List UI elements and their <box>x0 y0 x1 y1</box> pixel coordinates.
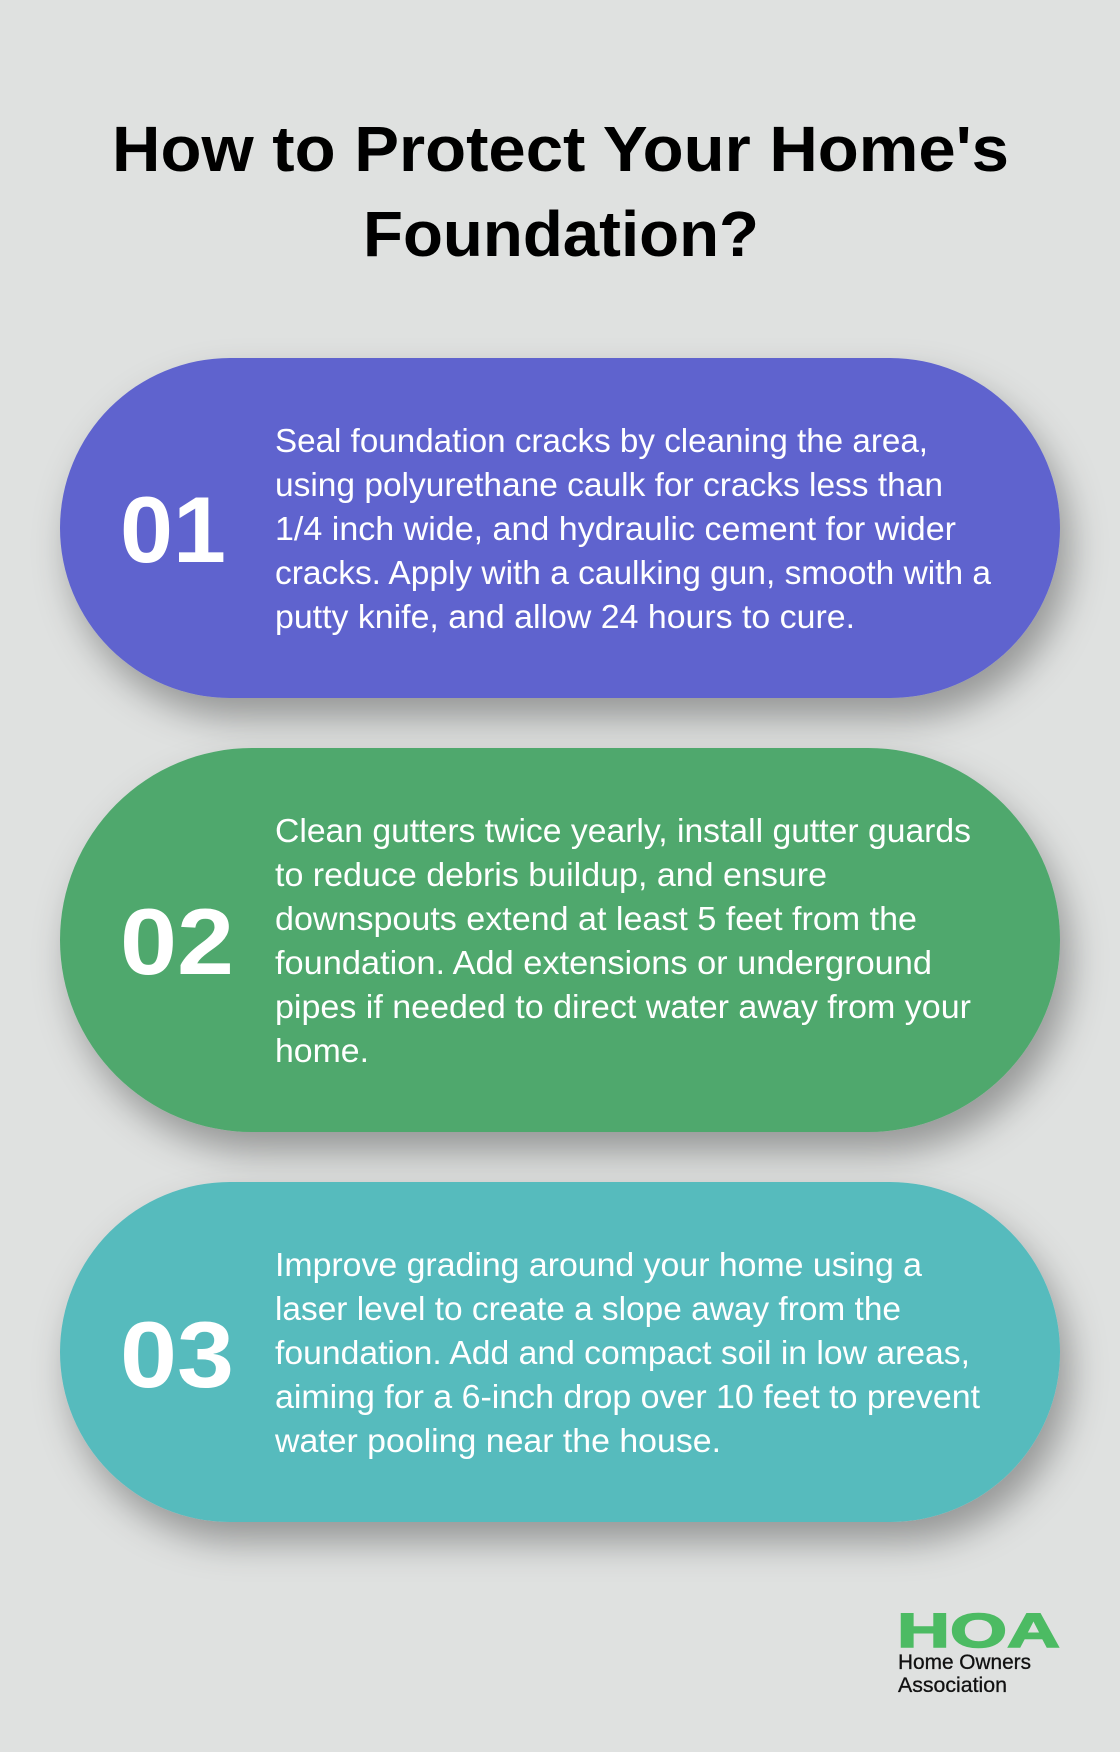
step 01 text: 1/4 inch wide, and hydraulic cement for wider <box>275 510 956 547</box>
step number 01: 01 <box>120 477 226 582</box>
step 02 text: pipes if needed to direct water away from your <box>275 988 971 1025</box>
step 03 text: Improve grading around your home using a <box>275 1246 923 1283</box>
title: Foundation? <box>363 198 759 270</box>
logo: HOA Home Owners Association <box>897 1605 1060 1697</box>
panel: step 03 grading <box>60 1182 1060 1522</box>
step 02 text: Clean gutters twice yearly, install gutter guards <box>275 812 971 849</box>
step 01 text: putty knife, and allow 24 hours to cure. <box>275 598 855 635</box>
step 03 text: foundation. Add and compact soil in low areas, <box>275 1334 970 1371</box>
title: How to Protect Your Home's <box>112 113 1009 185</box>
step 02 text: to reduce debris buildup, and ensure <box>275 856 827 893</box>
step 02 text: foundation. Add extensions or underground <box>275 944 932 981</box>
panel: step 02 gutters <box>60 748 1060 1132</box>
step 01 text: cracks. Apply with a caulking gun, smooth with a <box>275 554 992 591</box>
logo: HOA Home Owners Association: Association <box>898 1674 1007 1697</box>
logo: HOA Home Owners Association: Home Owners <box>898 1651 1031 1674</box>
step number 03: 03 <box>120 1302 234 1407</box>
step 01 text <box>275 422 992 635</box>
step 03 text: water pooling near the house. <box>274 1422 721 1459</box>
step 01 text: Seal foundation cracks by cleaning the area, <box>275 422 928 459</box>
step 01 text: using polyurethane caulk for cracks less than <box>275 466 943 503</box>
step 03 text: laser level to create a slope away from the <box>275 1290 901 1327</box>
logo: HOA Home Owners Association: HOA <box>897 1605 1060 1658</box>
step number 02: 02 <box>120 889 234 994</box>
panel: step 01 seal cracks <box>60 358 1060 698</box>
step 03 text <box>274 1246 980 1459</box>
step 03 text: aiming for a 6-inch drop over 10 feet to prevent <box>275 1378 980 1415</box>
step 02 text <box>275 812 971 1069</box>
step 02 text: home. <box>275 1032 369 1069</box>
step 02 text: downspouts extend at least 5 feet from the <box>275 900 917 937</box>
title <box>112 113 1009 270</box>
